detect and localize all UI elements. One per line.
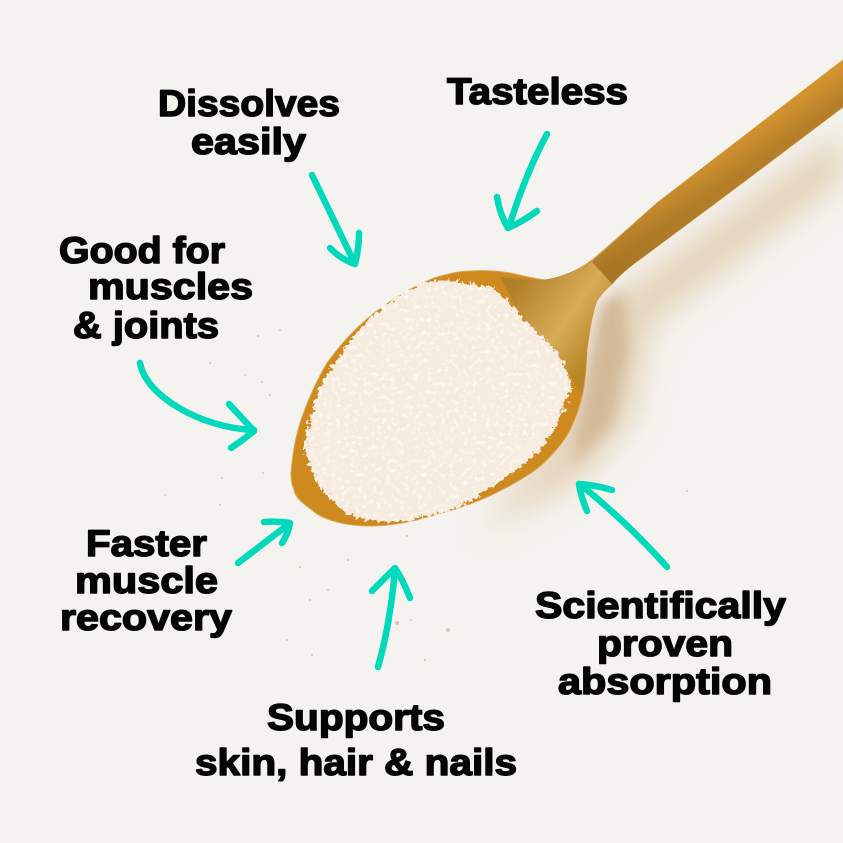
label: & joints [73,305,219,346]
spoon shadow [480,130,843,532]
label: Scientifically [535,585,786,626]
callout: Faster muscle recovery [60,522,290,638]
label: Supports [267,697,445,738]
label: skin, hair & nails [195,742,517,783]
gold spoon [291,60,843,526]
label [60,523,232,638]
label: easily [191,121,306,162]
spoon body and handle [291,60,843,526]
label: Dissolves [158,83,340,124]
label: Good for [59,230,225,271]
callout: Tasteless [447,71,628,228]
arrow [372,568,410,667]
brushed neck highlight [500,262,612,395]
label: recovery [60,597,232,638]
label: Faster [86,523,207,564]
callout: Good for muscles & joints [59,230,254,448]
label [535,585,786,702]
callout: Supports skin, hair & nails [195,568,517,783]
arrow [140,363,254,448]
label: absorption [558,661,772,702]
label [158,83,340,162]
label [195,697,517,783]
collagen powder [304,281,571,521]
label: muscle [75,560,218,601]
arrow [312,175,359,264]
label [59,230,253,346]
label: Tasteless [447,71,628,112]
handle shine [592,60,843,284]
label: muscles [88,266,253,307]
label: proven [597,623,733,664]
arrow [238,522,290,563]
specks of powder [164,329,688,661]
callout: Dissolves easily [158,83,359,264]
arrow [579,484,667,567]
arrow [497,134,547,228]
callout: Scientifically proven absorption [535,484,786,702]
handle darkening [592,60,843,284]
